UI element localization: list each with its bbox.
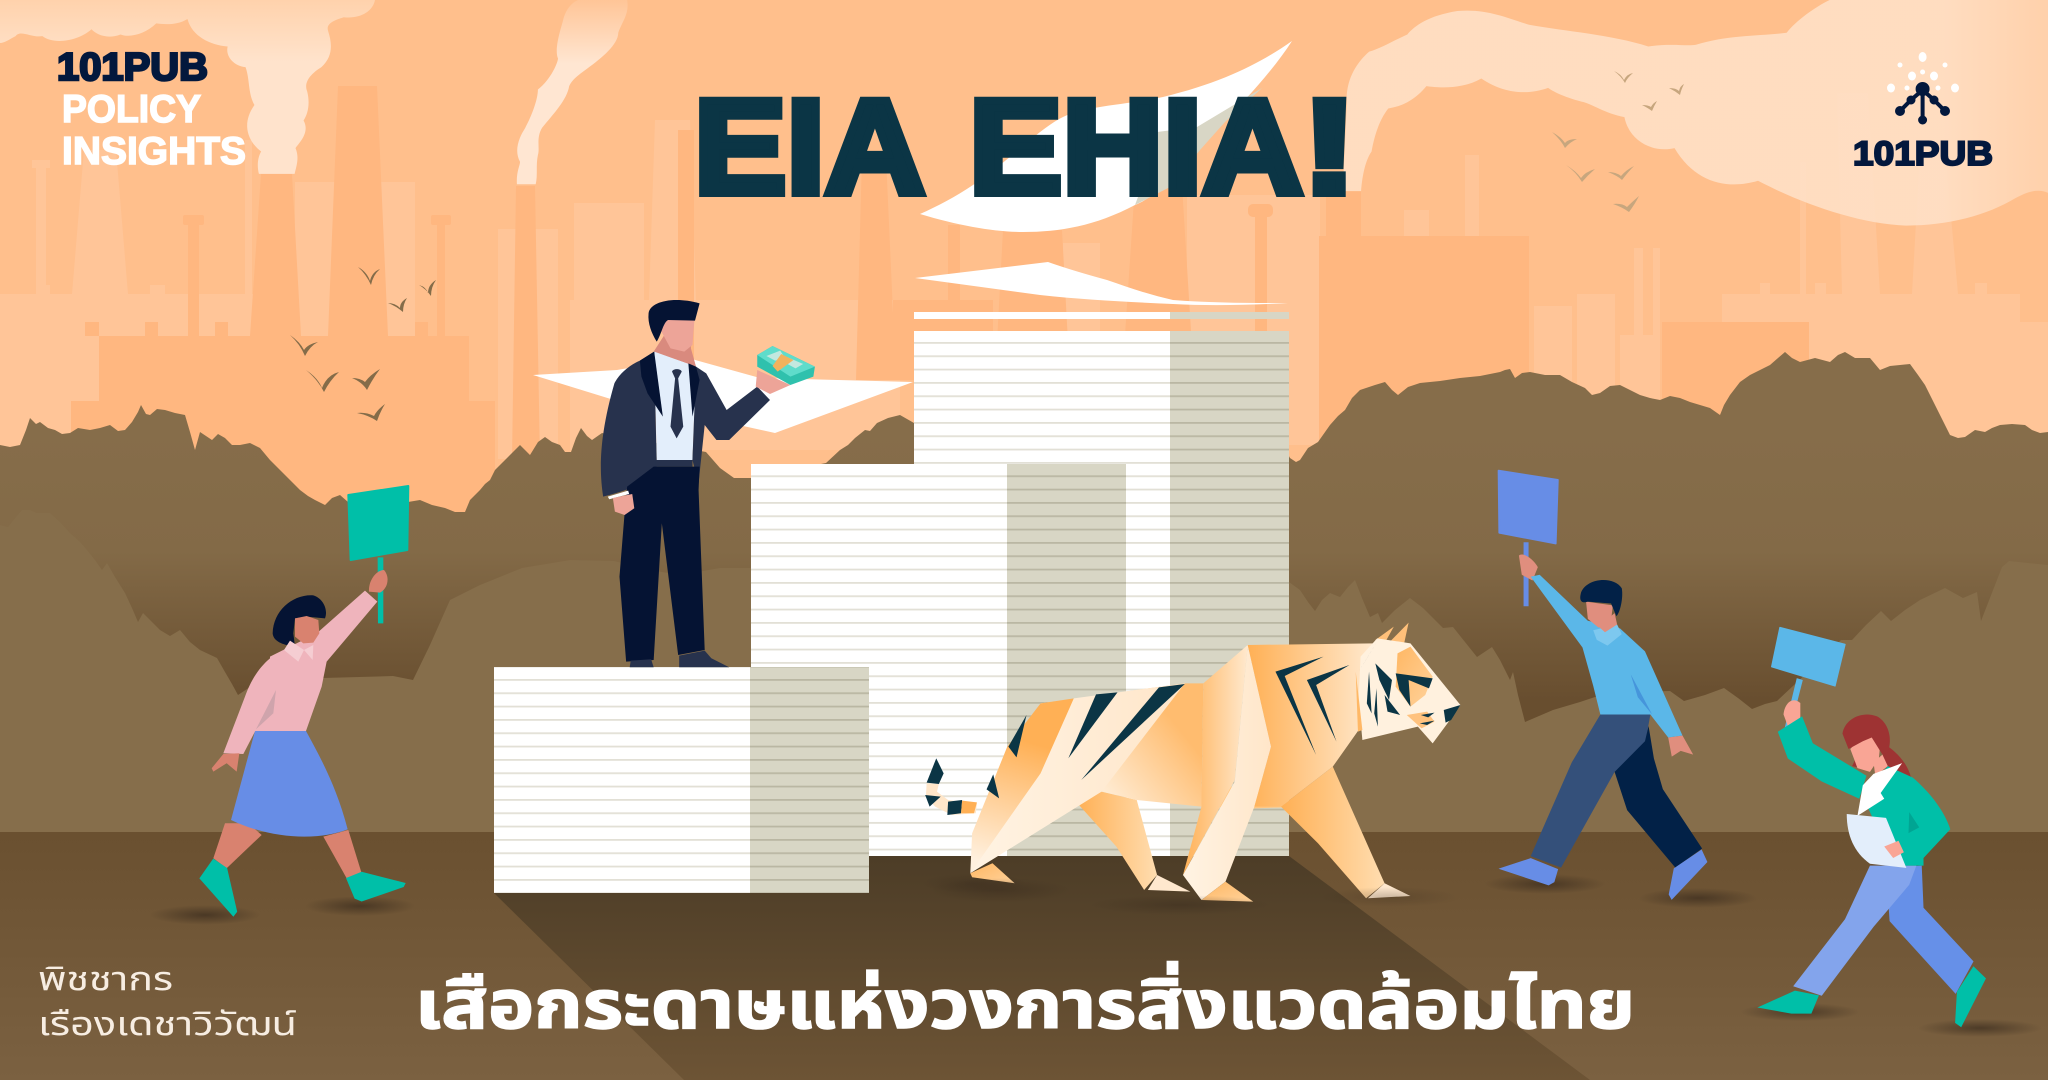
logo: 101PUB with network icon: [1853, 52, 1993, 173]
ears: [1375, 623, 1409, 657]
man in suit holding cash: [601, 300, 815, 667]
author name: เรืองเดชาวิวัฒน์: [38, 1005, 297, 1042]
origami tiger: [922, 623, 1460, 902]
sign: [1499, 471, 1558, 606]
protester: man in blue with blue sign: [1499, 471, 1707, 899]
front far paw: [1368, 883, 1410, 898]
title: EIA EHIA!: [694, 73, 1357, 222]
head: [1359, 638, 1460, 743]
hip: [970, 698, 1074, 873]
author name: [38, 960, 297, 1042]
single sheet on stack: [914, 312, 1289, 319]
sign: [348, 486, 408, 623]
body stripes: [987, 642, 1435, 798]
sign: [1772, 628, 1845, 732]
logo: 101PUB with network icon: 101PUB: [1853, 135, 1993, 173]
paper stack: middle: [751, 464, 1126, 856]
floating paper: large curved sheet: [920, 41, 1292, 232]
floating paper: behind man: [533, 358, 913, 433]
person shadows: [150, 874, 2042, 1037]
shoulder: [1183, 645, 1248, 875]
front far leg: [1281, 767, 1385, 898]
protester: woman in green with paper: [1759, 628, 1985, 1026]
paper stack ground shadow: [494, 856, 1590, 1080]
paper stack: tall: [914, 331, 1289, 856]
far factories skyline: [0, 93, 2048, 500]
protester: woman in pink with green sign: [200, 486, 408, 916]
author name: พิชชากร: [38, 960, 173, 997]
ground: [0, 832, 2048, 1080]
birds: right flock: [1552, 71, 1684, 212]
smoke: thin column: [517, 0, 628, 184]
nose: [1444, 705, 1460, 723]
hind far leg: [1078, 792, 1157, 890]
subtitle: เสือกระดาษแห่งวงการสิ่งแวดล้อมไทย: [415, 961, 1635, 1043]
flank: [1041, 683, 1203, 807]
cash bundle: [757, 346, 815, 385]
smoke: left cloud and column: [0, 0, 375, 174]
neck: [1248, 643, 1373, 807]
logo: 101PUB POLICY INSIGHTS: POLICY: [62, 88, 201, 131]
logo: 101PUB POLICY INSIGHTS: [57, 46, 246, 173]
smoke: right cloud: [1343, 0, 2048, 226]
title: EIA EHIA!: EHIA: [969, 73, 1303, 222]
front hills: [0, 510, 2048, 840]
birds: left flock: [290, 267, 436, 421]
ground shadow: [922, 873, 1026, 893]
hind paw: [970, 863, 1015, 883]
floating paper: thin curved sheet: [915, 262, 1288, 305]
tail: [925, 758, 977, 815]
logo: 101PUB POLICY INSIGHTS: 101PUB: [57, 46, 208, 89]
near factories skyline: [71, 86, 1809, 520]
icon: network dots: [1887, 52, 1959, 124]
paper stack: low: [494, 667, 869, 893]
title: EIA EHIA!: !: [1302, 73, 1357, 222]
tiger shadow on ground: [930, 878, 1460, 915]
belly underside: [1201, 787, 1285, 808]
cream back: [970, 683, 1185, 873]
hind far paw: [1148, 875, 1190, 892]
front paw: [1201, 882, 1253, 902]
back hills: [0, 352, 2048, 840]
logo: 101PUB POLICY INSIGHTS: INSIGHTS: [62, 130, 246, 173]
title: EIA EHIA!: EIA: [694, 73, 925, 222]
